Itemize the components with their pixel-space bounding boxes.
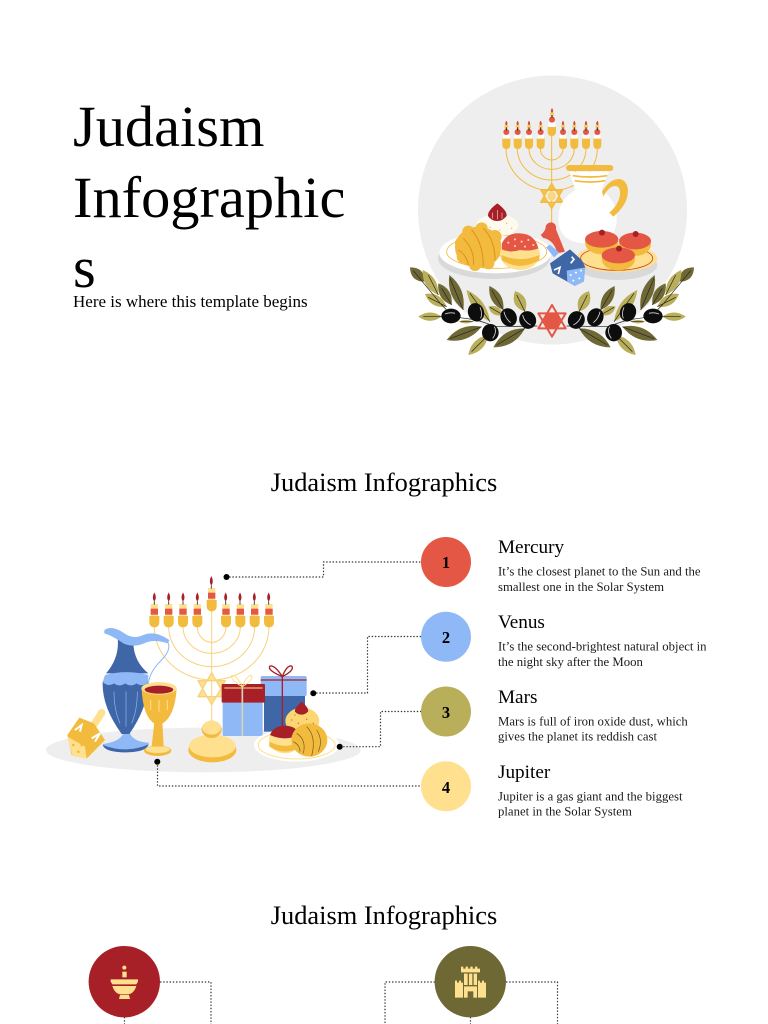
connector 2 <box>310 636 421 696</box>
illustration: table with menorah, jug, goblet and gifts <box>46 576 361 772</box>
right plate with doughnuts <box>576 230 657 280</box>
item 3: Mars <box>421 686 688 744</box>
title: Infographic <box>73 165 345 230</box>
item 4: Jupiter <box>421 761 683 818</box>
item 1: Mercury: smallest one in the Solar System <box>498 580 664 594</box>
item 1: Mercury <box>421 537 701 594</box>
menorah <box>502 108 601 225</box>
title: s <box>73 235 96 300</box>
item 3: Mars: Mars <box>498 687 537 708</box>
olive branch right <box>565 267 694 355</box>
section heading 1: Judaism Infographics <box>271 467 497 497</box>
jug <box>558 165 628 243</box>
item 4: Jupiter: 4 <box>442 778 450 797</box>
connectors from red circle <box>124 982 211 1024</box>
connector 1 <box>224 562 421 580</box>
item 4: Jupiter: planet in the Solar System <box>498 804 632 818</box>
icon circle: castle <box>435 946 506 1017</box>
gift boxes <box>222 666 307 736</box>
red star of David <box>538 305 566 337</box>
item 2: Venus: It’s the second-brightest natural object in <box>498 640 707 654</box>
connector 3 <box>337 712 421 750</box>
icon circle: oil lamp <box>89 946 160 1017</box>
dreidel <box>546 245 585 286</box>
item 3: Mars: 3 <box>442 703 450 722</box>
item 3: Mars: gives the planet its reddish cast <box>498 730 657 744</box>
subtitle: Here is where this template begins <box>73 292 308 311</box>
menorah <box>149 576 274 762</box>
jug <box>103 628 169 752</box>
item 2: Venus <box>421 612 707 669</box>
connector 4 <box>154 759 421 786</box>
item 1: Mercury: Mercury <box>498 537 564 558</box>
item 4: Jupiter: Jupiter is a gas giant and the biggest <box>498 789 683 803</box>
item 3: Mars: Mars is full of iron oxide dust, which <box>498 714 688 728</box>
section heading 2: Judaism Infographics <box>271 900 497 930</box>
plate of pastries <box>254 702 339 762</box>
item 4: Jupiter: Jupiter <box>498 762 551 783</box>
left plate with pastries <box>438 203 551 279</box>
item 1: Mercury: It’s the closest planet to the Sun and the <box>498 565 701 579</box>
table shadow <box>46 728 361 772</box>
title: Judaism <box>73 94 264 159</box>
title <box>73 94 345 300</box>
item 2: Venus: the night sky after the Moon <box>498 655 643 669</box>
olive branch left <box>410 267 539 355</box>
item 2: Venus: 2 <box>442 628 450 647</box>
connectors from olive circle <box>385 982 558 1024</box>
illustration: menorah, jug, plates and olive wreath <box>410 76 694 355</box>
item 2: Venus: Venus <box>498 612 545 633</box>
goblet <box>141 682 177 756</box>
item 1: Mercury: 1 <box>442 553 450 572</box>
bell base of menorah <box>541 222 565 253</box>
dreidel <box>67 713 105 759</box>
